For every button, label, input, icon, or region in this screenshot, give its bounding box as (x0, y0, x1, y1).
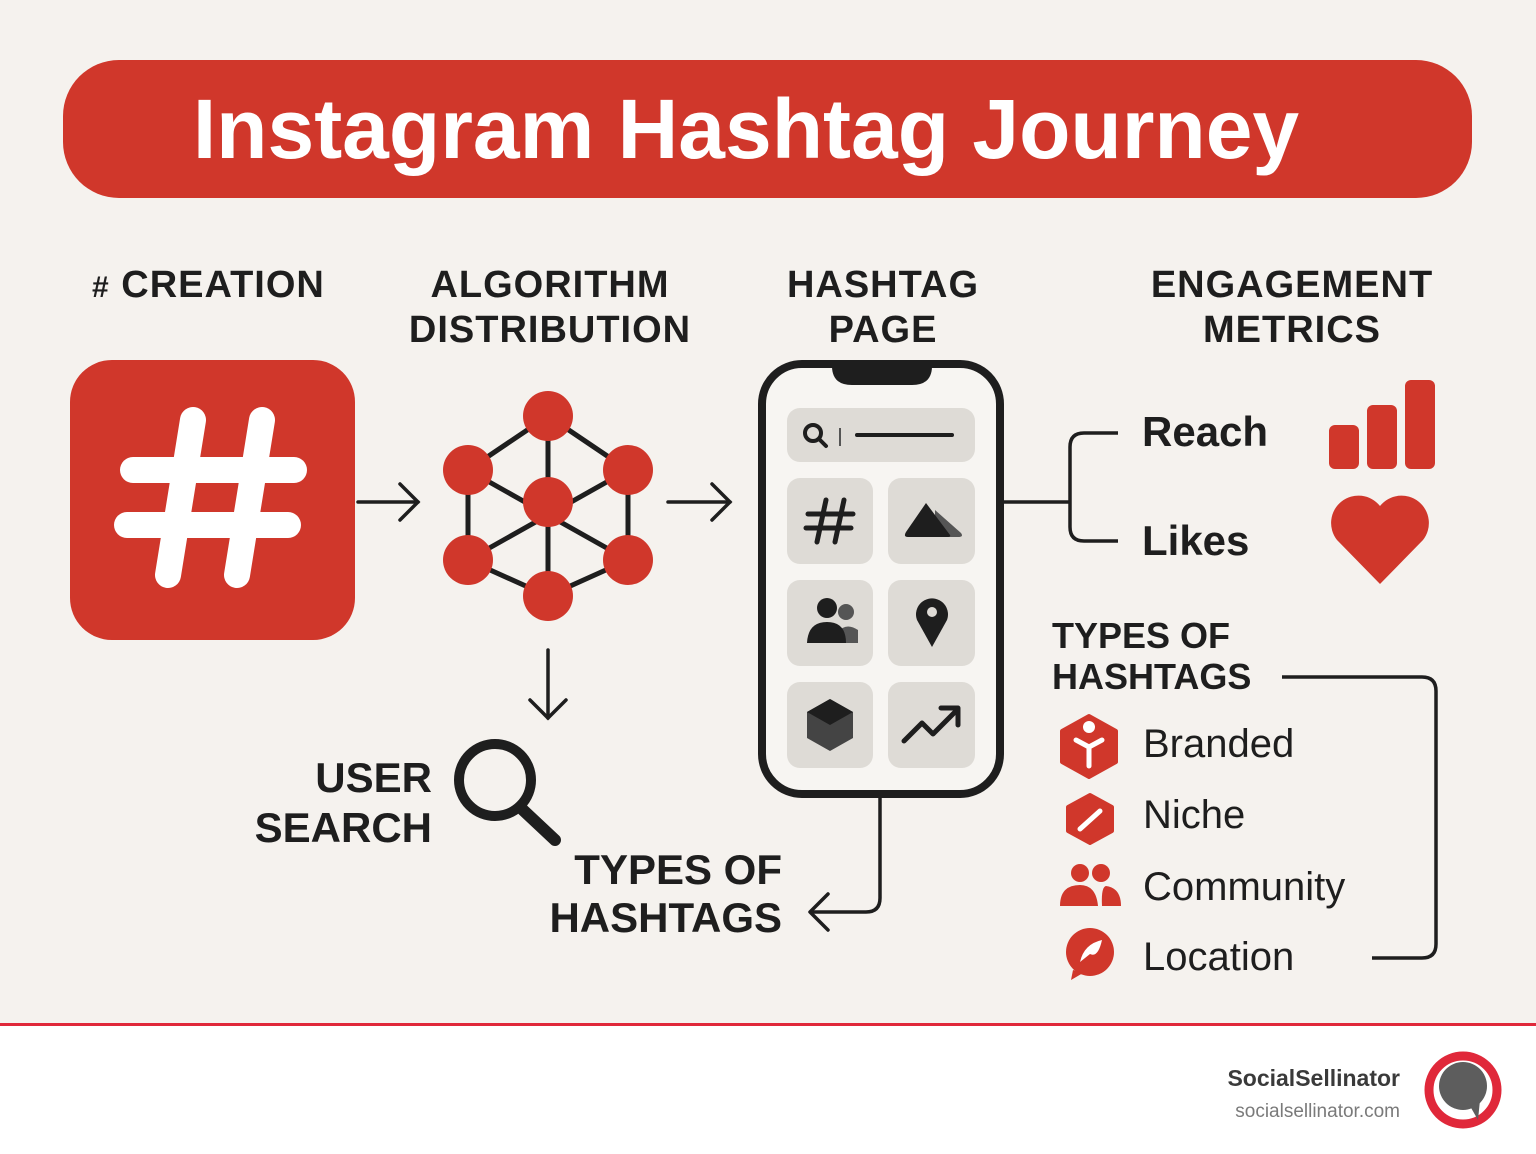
tile icon: hash (806, 500, 853, 542)
text: reach: Reach (1142, 408, 1268, 455)
search bar (787, 408, 975, 462)
list item: branded: Branded (1143, 722, 1294, 766)
list item: location: Location (1143, 935, 1294, 979)
footer brand text: socialsellinator.com (1235, 1101, 1400, 1122)
heading: algorithm distribution: DISTRIBUTION (409, 309, 691, 351)
list item: niche: Niche (1143, 793, 1245, 837)
phone: hashtag page (762, 364, 1000, 794)
tile icon: cube (807, 699, 853, 751)
heading: types of hashtags (right): TYPES OF (1052, 615, 1230, 656)
tile icon: trending arrow (904, 708, 958, 741)
list item: community: Community (1143, 865, 1345, 909)
footer (0, 1023, 1536, 1154)
icon: hashtag creation square (70, 360, 355, 640)
list item: community (1060, 864, 1345, 909)
heading: engagement metrics: METRICS (1203, 309, 1381, 351)
bracket: hashtag types (1282, 677, 1436, 958)
footer brand text (1227, 1065, 1400, 1122)
tile icon: mountains (905, 503, 962, 537)
list item: location (1066, 928, 1294, 980)
text: likes: Likes (1142, 517, 1249, 564)
icon: network graph (443, 391, 653, 621)
heading: hashtag page: PAGE (829, 309, 937, 351)
text: user search: USER (315, 754, 432, 801)
text: types of hashtags (bottom): HASHTAGS (549, 894, 782, 941)
heading: engagement metrics: ENGAGEMENT (1151, 264, 1433, 306)
list item: niche (1068, 793, 1245, 843)
icon: magnifier (459, 744, 555, 840)
text: types of hashtags (bottom): TYPES OF (574, 846, 782, 893)
footer logo (1429, 1056, 1497, 1124)
text: user search: SEARCH (255, 804, 432, 851)
list item: branded (1062, 716, 1294, 777)
icon: heart (1331, 496, 1429, 584)
arrow: creation to algorithm (358, 484, 418, 520)
tile icon: location pin (916, 598, 948, 647)
tile icon: people (807, 598, 858, 643)
heading: types of hashtags (right): HASHTAGS (1052, 656, 1251, 697)
icon: bar chart (1329, 380, 1435, 469)
arrow: algorithm to hashtag page (668, 484, 730, 520)
heading: algorithm distribution: ALGORITHM (430, 264, 670, 306)
footer brand text: SocialSellinator (1227, 1065, 1400, 1091)
heading: creation: # CREATION (92, 264, 325, 306)
heading: hashtag page: HASHTAG (787, 264, 979, 306)
arrow: algorithm down to user search (530, 650, 566, 718)
connector: phone to metrics bracket (1004, 433, 1118, 541)
title banner: Instagram Hashtag Journey (193, 82, 1299, 176)
arrow: phone to types of hashtags (810, 797, 880, 930)
title banner (63, 60, 1472, 198)
